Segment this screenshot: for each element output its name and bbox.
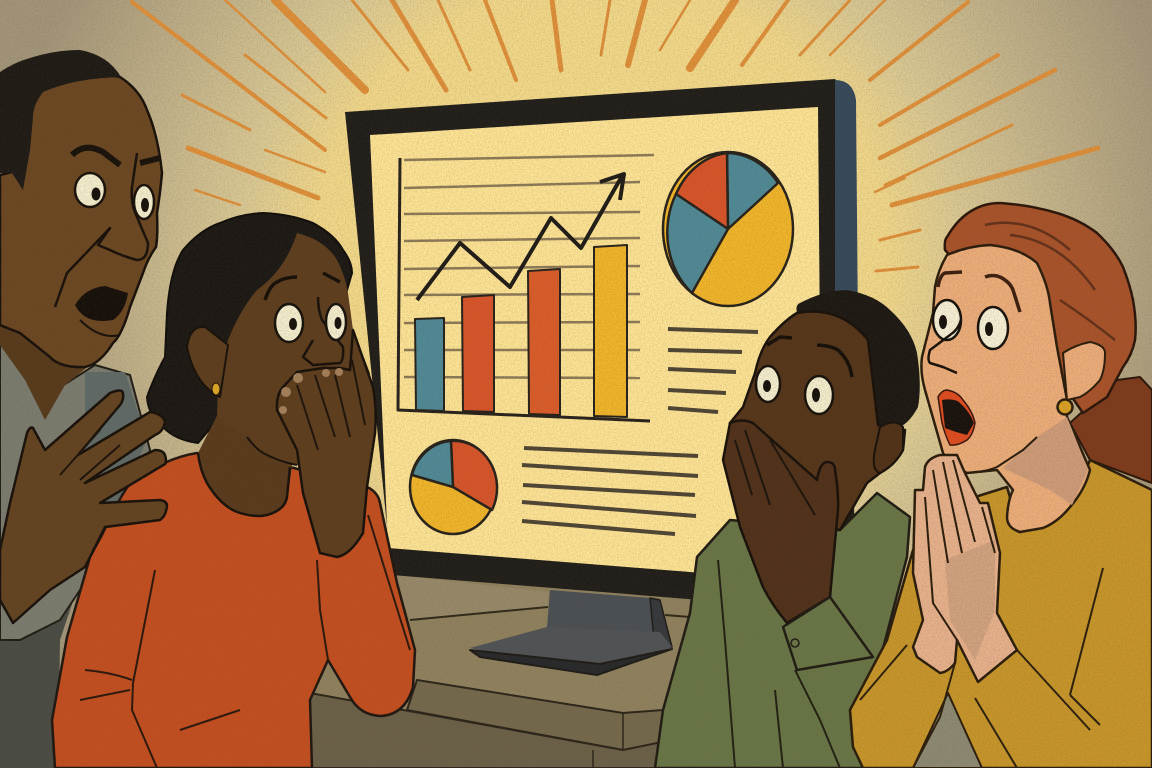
bar: red 2 [528, 269, 560, 415]
monitor stand [470, 590, 672, 675]
shirt folds [718, 560, 840, 768]
hair [0, 50, 121, 190]
head [0, 74, 162, 367]
brows [938, 272, 1020, 312]
man's hand on woman's shoulder [0, 390, 167, 623]
earring [212, 383, 220, 395]
monitor frame [345, 79, 858, 612]
shirt [0, 338, 150, 640]
hand over mouth [723, 420, 838, 623]
eyes [756, 366, 780, 402]
bar: red 1 [462, 295, 494, 412]
bar: blue [415, 318, 444, 411]
hair strands [985, 223, 1115, 340]
eyes [275, 304, 303, 342]
sweater [52, 453, 415, 768]
eyes [933, 300, 961, 340]
brows [265, 273, 340, 300]
sweater [850, 460, 1152, 768]
nose [928, 320, 961, 373]
ear [874, 422, 903, 473]
finger lines [925, 460, 995, 640]
monitor side edge [835, 80, 858, 340]
face [217, 233, 372, 465]
praying hands [913, 455, 1017, 682]
neck [198, 400, 300, 516]
mouth [938, 390, 975, 445]
hair [796, 290, 920, 440]
bar: yellow [594, 245, 627, 417]
sweater folds [80, 515, 410, 768]
pie chart large [663, 152, 793, 306]
brows [767, 337, 852, 377]
trend arrow [417, 174, 624, 300]
jaw line [967, 437, 1037, 473]
orange light rays [132, 0, 1098, 271]
brows [72, 148, 160, 165]
gap between sleeve and body [913, 693, 982, 768]
dark lower shirt [0, 520, 100, 768]
green shirt [655, 493, 910, 768]
text lines right [668, 329, 758, 412]
hair back [147, 213, 352, 443]
sweater folds [860, 568, 1103, 768]
neck [0, 320, 90, 420]
ponytail [1070, 377, 1152, 483]
person 1: man on far left [0, 50, 162, 768]
monitor [345, 79, 858, 612]
eyes [75, 173, 105, 207]
nose [303, 297, 343, 365]
neck shadow [1003, 417, 1088, 505]
person 2: woman in red sweater [52, 213, 415, 768]
shirt cuff [783, 597, 873, 670]
desk [310, 570, 700, 768]
mouth [75, 286, 128, 321]
pie chart small [410, 440, 497, 534]
nose and cheek lines [55, 153, 148, 307]
person 3: man in green shirt [655, 290, 920, 768]
ear [1063, 342, 1105, 400]
ear [187, 327, 228, 397]
cuff button [791, 639, 799, 647]
palm shading [945, 540, 995, 660]
hand over mouth [277, 330, 376, 557]
earring [1058, 400, 1072, 414]
jaw line [247, 437, 297, 465]
monitor screen [370, 107, 822, 583]
person 4: red-haired woman in yellow sweater [850, 203, 1152, 768]
head [730, 312, 905, 530]
hair [945, 203, 1136, 413]
face and neck [921, 245, 1090, 532]
text lines bottom [522, 448, 698, 534]
line chart and bars [398, 155, 654, 421]
